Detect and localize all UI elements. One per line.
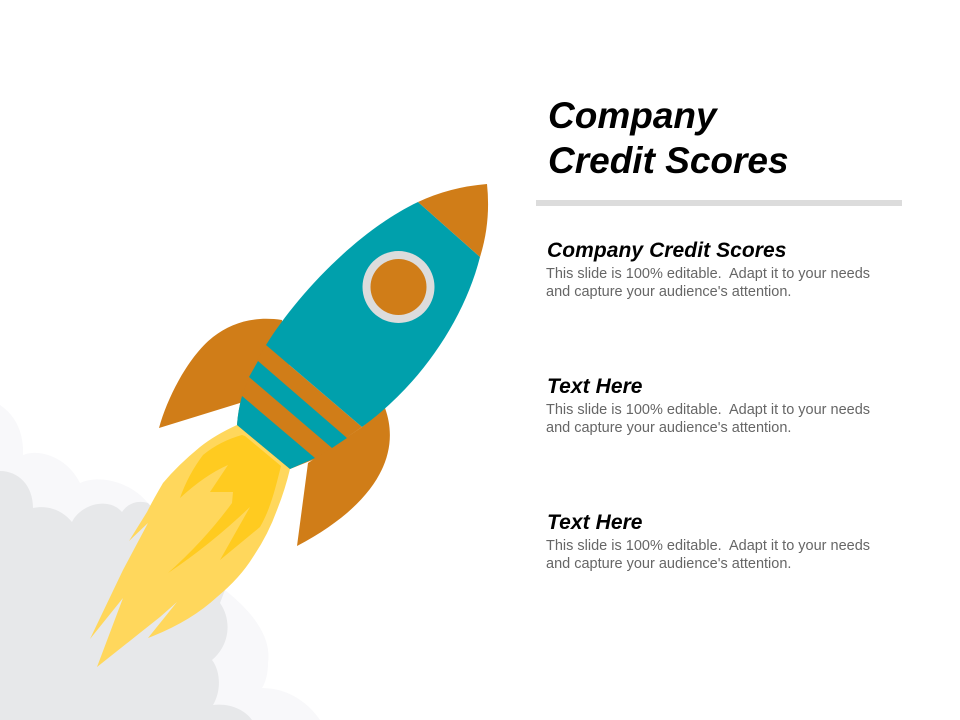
divider (536, 200, 902, 206)
right fin (297, 408, 390, 546)
text block 2 (546, 375, 870, 436)
teal base (237, 396, 315, 469)
text block 2: This slide is 100% editable. Adapt it to your needs and capture your audience's attention. (546, 402, 870, 436)
text block 3: This slide is 100% editable. Adapt it to your needs and capture your audience's attention. (546, 538, 870, 572)
light smoke cloud (0, 405, 320, 720)
title: Company Credit Scores (548, 95, 789, 181)
teal stripe (249, 361, 347, 448)
left fin (159, 319, 290, 428)
orange band section (237, 345, 362, 469)
inner flame (168, 435, 281, 573)
dark smoke cloud (0, 471, 252, 720)
window (362, 251, 434, 323)
rocket body (266, 202, 480, 427)
text block 2: Text Here (547, 375, 643, 398)
text block 1 (546, 239, 870, 300)
text block 3 (546, 511, 870, 572)
outer flame (90, 425, 290, 667)
text block 3: Text Here (547, 511, 643, 534)
rocket nose (418, 184, 488, 257)
text block 1: This slide is 100% editable. Adapt it to your needs and capture your audience's attention. (546, 266, 870, 300)
text block 1: Company Credit Scores (547, 239, 787, 262)
